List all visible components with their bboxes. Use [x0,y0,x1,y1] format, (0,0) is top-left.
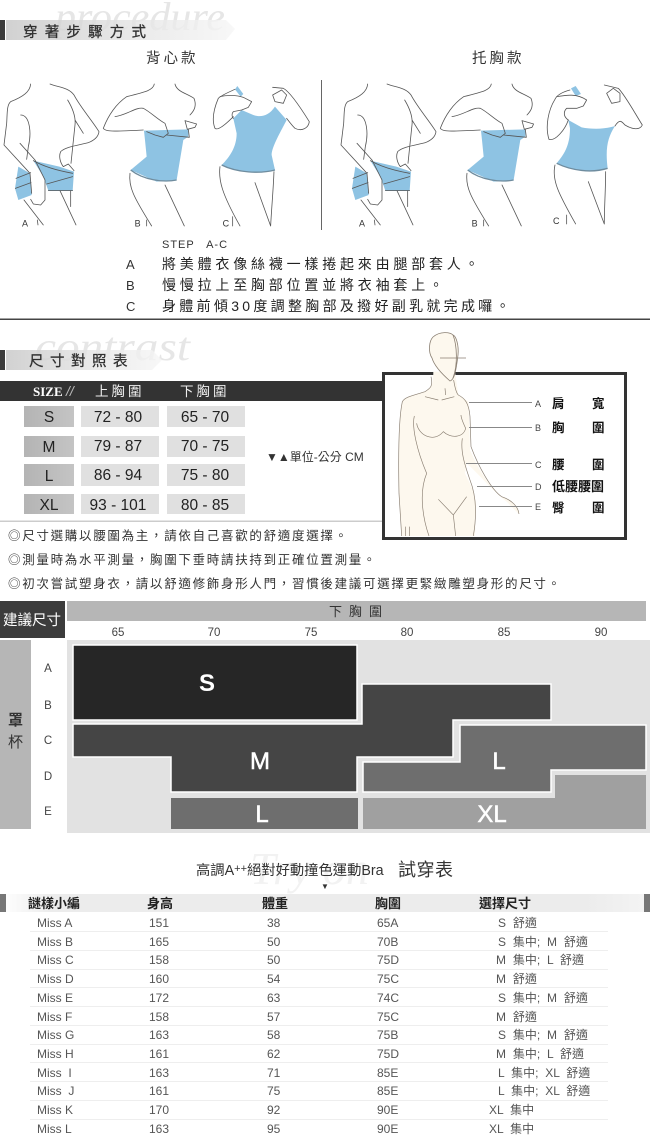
underbust scale: 85 [498,627,510,639]
cup axis: B [44,700,52,712]
measurement labels: 圍 [592,501,605,515]
size block L right: L [492,748,506,775]
trial table title [196,843,454,894]
trial table rows: 65A [377,916,398,930]
trial table rows: Miss E [37,991,73,1005]
trial table rows: 75 [267,1084,281,1098]
cup axis [0,640,52,829]
size table header [0,381,383,401]
underbust scale: 90 [595,627,607,639]
trial table rows: 90E [377,1103,398,1117]
unit note: ▼▲單位-公分 CM [266,449,364,464]
chart corner label: 建議尺寸 [3,611,61,629]
trial table rows: Miss L [37,1122,72,1136]
trial table rows: 75D [377,953,399,967]
step instructions [126,256,513,314]
illustration: push-up step A: A [359,219,365,229]
fitting notes: ◎測量時為水平測量，胸圍下垂時請扶持到正確位置測量。 [8,552,377,567]
underbust scale: 80 [401,627,413,639]
trial table rows: 172 [149,991,169,1005]
head [429,333,458,381]
trial table rows: 163 [149,1066,169,1080]
cup axis: C [44,735,52,747]
size block L bottom [171,798,358,829]
size table rows: 80 - 85 [181,497,229,514]
illustration: vest step B: B [135,219,141,229]
size table rows: 75 - 80 [181,467,230,484]
trial table rows: Miss H [37,1047,74,1061]
trial table rows: 170 [149,1103,169,1117]
illustration: push-up step B: B [472,219,478,229]
trial table rows: 158 [149,1010,169,1024]
measurement labels: 寬 [592,396,605,411]
trial table header: 胸圍 [375,896,401,911]
size table rows: L [45,468,54,485]
size block M: M [250,748,270,775]
trial table title: 試穿表 [398,860,454,880]
trial table rows [30,915,608,1136]
size table header: // [65,383,76,399]
underbust scale: 70 [208,627,220,639]
measurement labels: 腰 [552,458,565,472]
trial table rows: S 集中; M 舒適 [498,1027,588,1042]
cup axis: A [44,663,52,675]
trial table header: 選擇尺寸 [479,896,531,911]
measurement labels: C [535,460,542,470]
trial table rows: Miss D [37,972,74,986]
size table rows: S [44,409,54,426]
illustration: push-up step A [341,84,436,229]
trial table rows: M 集中; L 舒適 [496,952,584,967]
section heading: 尺寸對照表: contrast [35,324,191,369]
trial table header: 謎樣小編 [28,896,80,911]
trial table rows: 75C [377,1010,399,1024]
measurement labels: 低腰腰圍 [552,479,604,494]
step instructions: 身體前傾30度調整胸部及撥好副乳就完成囉。 [162,298,513,314]
trial table rows: M 舒適 [496,1009,537,1024]
trial table rows: 75B [377,1028,398,1042]
trial table rows: S 集中; M 舒適 [498,934,588,949]
trial table rows: 70B [377,935,398,949]
trial table rows: 158 [149,953,169,967]
size table rows: 70 - 75 [181,438,229,455]
fitting notes: ◎初次嘗試塑身衣，請以舒適修飾身形人門，習慣後建議可選擇更緊緻雕塑身形的尺寸。 [8,576,562,591]
trial table rows: 163 [149,1028,169,1042]
trial table rows: 161 [149,1047,169,1061]
measurement labels: 圍 [592,458,605,472]
trial table rows: 85E [377,1084,398,1098]
size table rows: XL [40,497,59,514]
measurement labels: E [535,502,541,512]
trial table rows: Miss C [37,953,74,967]
trial table rows: 58 [267,1028,281,1042]
trial table rows: Miss A [37,916,72,930]
step instructions: A [126,257,135,272]
size block S [73,645,357,720]
subheading: 背心款: 背心款 [146,50,198,67]
trial table rows: 74C [377,991,399,1005]
trial table rows: XL 集中 [489,1121,534,1136]
illustration: push-up step C [547,85,642,226]
measurement labels: B [535,423,541,433]
measurement labels: 胸 [552,420,565,435]
illustration: vest step A [4,84,99,229]
trial table rows: 50 [267,953,281,967]
measurement labels: 肩 [552,396,565,411]
trial table rows: M 集中; L 舒適 [496,1046,584,1061]
trial table rows: 95 [267,1122,281,1136]
trial table title: ++ [234,863,247,875]
trial table rows: Miss K [37,1103,73,1117]
trial table rows: 90E [377,1122,398,1136]
illustration: push-up step C: C [553,216,560,226]
trial table rows: 38 [267,916,281,930]
underbust scale: 65 [112,627,124,639]
section heading: 尺寸對照表 [0,324,191,370]
trial table rows: 92 [267,1103,281,1117]
trial table rows: Miss I [37,1066,72,1080]
size table header: 上胸圍 [95,384,144,399]
size table rows: 86 - 94 [94,467,143,484]
trial table rows: L 集中; XL 舒適 [498,1065,590,1080]
trial table rows: Miss B [37,935,73,949]
trial table rows: 75C [377,972,399,986]
trial table title: Try on [250,843,369,894]
trial table rows: 54 [267,972,281,986]
size block L bottom: L [255,801,269,828]
trial table rows: 50 [267,935,281,949]
underbust scale: 75 [305,627,317,639]
trial table rows: S 舒適 [498,915,537,930]
trial table title: 高調A [196,863,234,879]
measurement labels: 圍 [592,421,605,435]
section heading: 穿著步驟方式 [0,0,235,41]
size table rows: 79 - 87 [94,438,142,455]
trial table header: 身高 [147,896,173,911]
size table rows: 72 - 80 [94,409,143,426]
chart corner label [0,601,65,638]
trial table rows: 151 [149,916,169,930]
step instructions: B [126,278,135,293]
trial table rows: Miss J [37,1084,74,1098]
trial table rows: M 舒適 [496,971,537,986]
trial table header [0,894,650,912]
cup axis: E [44,806,52,818]
size block XL: XL [477,801,507,828]
trial table rows: 75D [377,1047,399,1061]
trial table rows: Miss F [37,1010,72,1024]
trial table rows: S 集中; M 舒適 [498,990,588,1005]
measurement labels: 臀 [552,501,565,515]
section heading: 穿著步驟方式: 穿著步驟方式 [23,24,153,41]
section heading: 尺寸對照表: 尺寸對照表 [29,353,134,370]
trial table title: 絕對好動撞色運動Bra [247,862,384,879]
size table header: 下胸圍 [180,384,230,399]
size table rows [24,406,245,514]
cup axis: 杯 [8,734,23,751]
vertical divider between styles [321,80,322,230]
underbust header: 下胸圍 [329,604,389,619]
illustration: vest step C: C [223,219,230,229]
size table rows: 65 - 70 [181,409,230,426]
trial table rows: 160 [149,972,169,986]
size block L right [363,725,646,792]
trial table rows: 71 [267,1066,281,1080]
size table rows: 93 - 101 [90,497,146,514]
step instructions: 將美體衣像絲襪一樣捲起來由腿部套人。 [162,256,482,272]
step instructions: 慢慢拉上至胸部位置並將衣袖套上。 [162,277,447,293]
fitting notes: ◎尺寸選購以腰圍為主，請依自己喜歡的舒適度選擇。 [8,528,349,543]
measurement diagram panel [384,333,626,538]
measurement labels [535,396,605,515]
trial table rows: 163 [149,1122,169,1136]
illustration: vest step B [103,84,197,229]
step caption: STEP A-C: STEP A-C [162,239,228,251]
trial table rows: 62 [267,1047,281,1061]
underbust header [67,601,646,621]
trial table rows: 161 [149,1084,169,1098]
measurement leader lines [466,402,532,506]
measurement labels: A [535,399,541,409]
size block M [73,684,551,792]
trial table rows: L 集中; XL 舒適 [498,1083,590,1098]
step instructions: C [126,299,135,314]
cup axis: D [44,771,52,783]
trial table title: ▼ [321,882,329,891]
size recommendation chart [0,601,650,833]
illustration: vest step A: A [22,219,28,229]
subheading: 托胸款: 托胸款 [472,50,524,67]
trial table rows: 85E [377,1066,398,1080]
trial table rows: 57 [267,1010,281,1024]
trial table rows: 63 [267,991,281,1005]
cup axis: 罩 [8,712,23,729]
illustration: push-up step B [440,84,534,229]
measurement labels: D [535,482,542,492]
trial table header: 體重 [262,896,288,911]
size block S: S [199,670,215,697]
illustration: vest step C [213,86,309,229]
trial table rows: 165 [149,935,169,949]
underbust scale [112,627,607,639]
trial table rows: XL 集中 [489,1102,534,1117]
size table header: SIZE [33,384,63,399]
size table rows: M [43,439,55,456]
body figure [399,333,519,536]
size block XL [363,775,646,829]
trial table rows: Miss G [37,1028,74,1042]
fitting notes [8,528,562,591]
